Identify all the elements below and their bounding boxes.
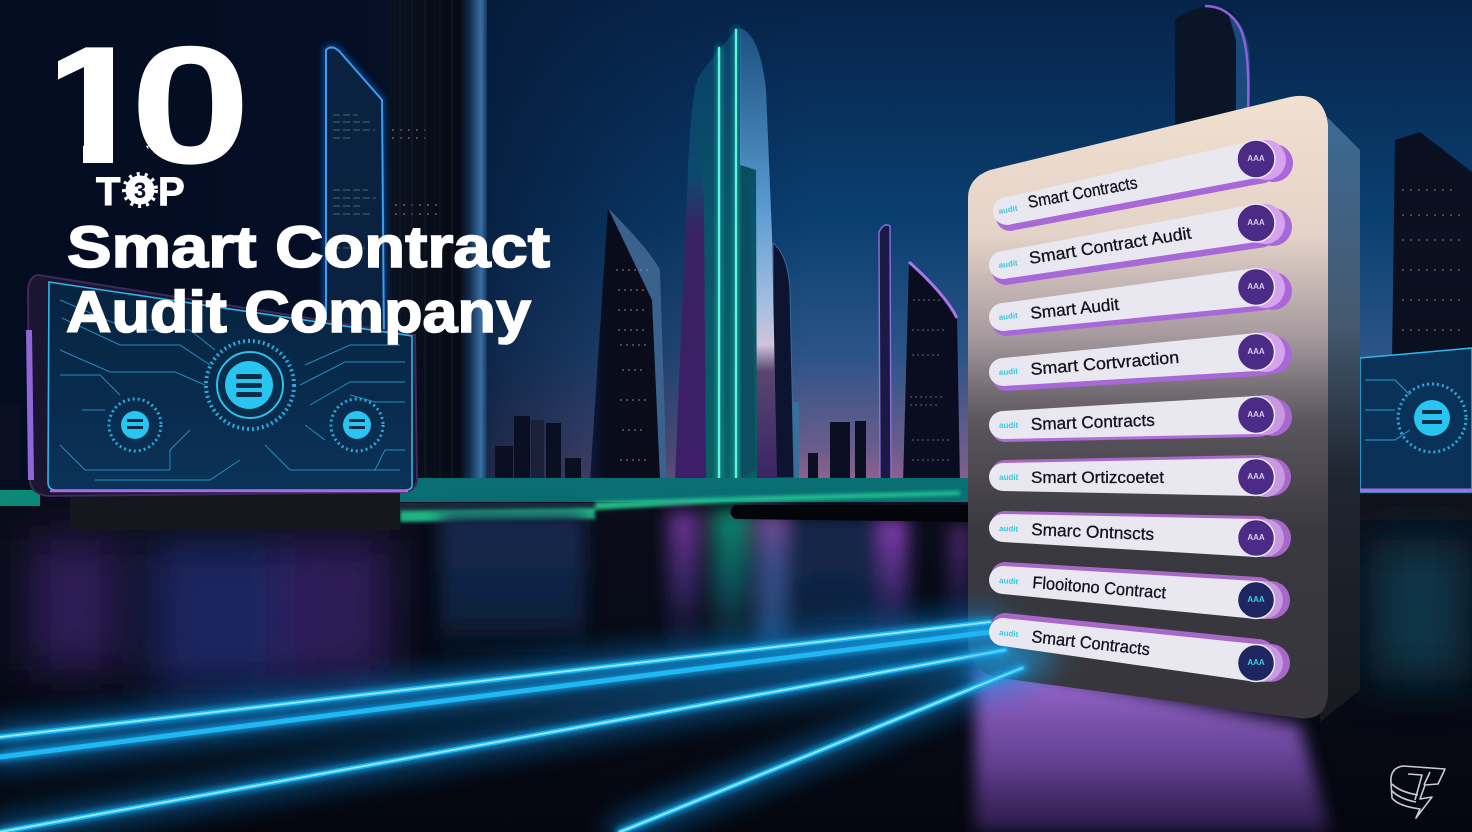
glass code panel [326,47,384,350]
pill 5: audit [999,421,1018,430]
tower: top right behind panel [1175,6,1250,130]
pill 7 [989,511,1291,557]
tower: central glass skyscraper [675,28,777,480]
title: number 10: 10 [33,12,243,199]
purple panel reflection [975,665,1330,832]
pill 7: audit [999,524,1019,534]
dark platform [730,505,970,522]
pill 8: AAA [1247,595,1265,604]
pill 6 [989,455,1291,497]
pill 2: AAA [1247,218,1265,227]
pill 1: audit [998,204,1018,216]
tower: back sliver [773,243,794,478]
pill 1: Smart Contracts [1026,173,1139,212]
circuit traces [60,300,405,480]
pill 6: audit [999,473,1018,482]
pill 8 [989,562,1290,619]
emblem: center [206,341,294,429]
tower: thin purple spire [879,225,891,480]
floor [0,478,1472,832]
title: top with gear: T [96,170,120,214]
pill 9: Smart Contracts [1031,627,1151,659]
title: smart contract: Smart Contract [67,215,550,280]
screen base [70,490,400,530]
pill 1 [993,140,1293,231]
pill 9: audit [999,628,1019,639]
title: audit company: Audit Company [66,280,531,345]
pill 3: Smart Audit [1029,295,1120,323]
pill 6: AAA [1247,472,1265,481]
pill 9: AAA [1247,658,1265,667]
pill 5: Smart Contracts [1030,411,1155,434]
pill 6: Smart Ortizcoetet [1031,468,1164,487]
pill 4: Smart Cortvraction [1030,348,1180,379]
list panel body [968,96,1360,722]
title: top with gear: 3 [134,178,146,203]
logo mark [1391,766,1445,818]
pill 2 [989,204,1292,285]
tower: right dark skyscraper [903,262,960,484]
tower: large dark column [388,0,487,490]
tower: left dark skyscraper [590,208,667,480]
title: top with gear: P [158,170,185,214]
left hologram screen [28,275,417,530]
neon stripes [719,30,736,478]
pill 5 [989,395,1292,442]
pill 3 [989,268,1292,336]
tower: far right [1392,132,1472,360]
right hologram screen [1360,348,1472,492]
pill 3: AAA [1247,282,1265,291]
pill 4: AAA [1247,347,1265,356]
emblem: right [331,399,383,451]
background: night sky [0,0,1472,550]
panel front [968,96,1328,718]
pill 4 [989,332,1292,391]
pill 7: Smarc Ontnscts [1031,520,1155,544]
pill 8: audit [999,576,1019,586]
title block [33,12,550,345]
emblem: left [109,399,161,451]
screen face [48,282,412,490]
pill 1: AAA [1247,154,1265,163]
pill 3: audit [998,311,1019,322]
screen frame [28,275,417,496]
pill 2: Smart Contract Audit [1028,223,1193,268]
pill 8: Flooitono Contract [1032,573,1167,603]
title: top with gear [96,170,185,214]
pill 5: AAA [1247,410,1265,419]
pill 9 [989,613,1290,682]
pill 4: audit [999,367,1019,377]
pill 7: AAA [1247,533,1265,542]
neon light lines [0,622,1060,832]
floor reflections [30,510,1470,690]
panel side face [1320,110,1360,722]
distant skyline [0,402,866,480]
menu pills [989,140,1293,682]
pill 2: audit [998,258,1019,270]
